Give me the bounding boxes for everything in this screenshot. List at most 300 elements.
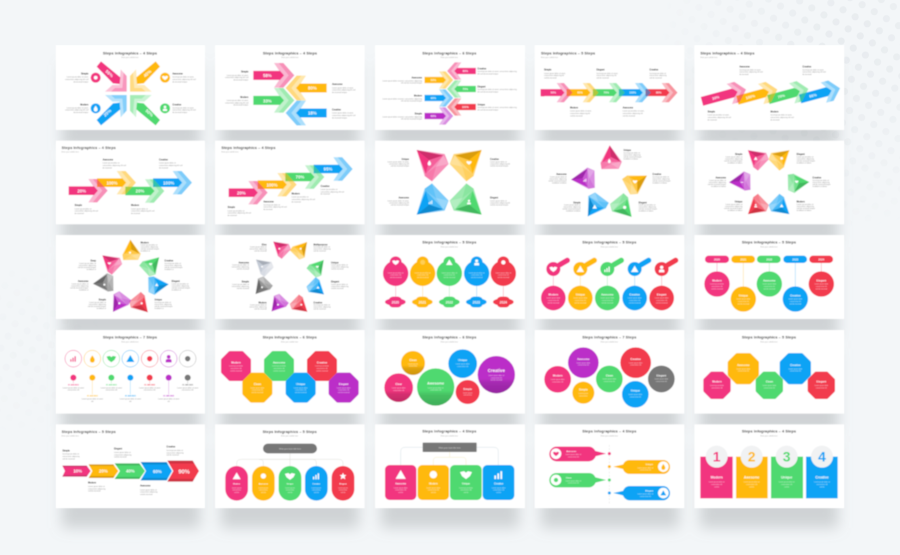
callout: green: Lorem ipsum dolor sit	[565, 479, 582, 482]
title: Steps Infographics – 4 Steps	[422, 430, 476, 434]
callout: yellow: Unique	[646, 464, 654, 466]
label: Awesome: Awesome	[623, 107, 634, 110]
label: Unique: incididunt ut labore	[623, 157, 638, 160]
label: Elegant: Elegant	[797, 153, 805, 156]
arrow: red: 80%	[656, 91, 662, 95]
panel: slide 3 six interlocking arrows: Enter your subtitle here	[441, 56, 458, 59]
label: Unique: sed do eiusmod	[331, 269, 343, 271]
step: red	[491, 256, 516, 307]
label: Modern: Modern	[770, 110, 779, 113]
label: Simple: Lorem ipsum dolor sit amet,	[67, 76, 89, 79]
step: pink: consectetur elit	[548, 299, 559, 302]
callout: yellow: Lorem ipsum dolor sit	[637, 466, 654, 469]
label: Multipurpose: Multipurpose	[313, 243, 328, 246]
panel: slide 8 four gems	[375, 141, 525, 224]
bubble: green: Clean	[606, 373, 613, 377]
octagon: pink: Modern	[712, 380, 722, 384]
label: Simple: consectetur adipiscing	[232, 285, 249, 288]
callout: green	[549, 473, 611, 487]
label: Modern: consectetur adipiscing	[88, 487, 105, 490]
panel: slide 5 slanted arrows: Enter your subtitle here	[700, 56, 718, 59]
arrow: pink	[69, 179, 108, 202]
label: Simple: consectetur adipiscing	[89, 303, 106, 306]
label: Modern: Lorem ipsum dolor sit	[292, 196, 309, 199]
callout: blue	[608, 486, 670, 500]
bubble: yellow: Lorem ipsum	[408, 363, 418, 365]
octagon: red: Lorem ipsum dolor	[814, 385, 829, 387]
label: Creative: Lorem ipsum dolor sit amet,	[332, 112, 354, 115]
label: Multipurpose: Lorem ipsum dolor sit	[313, 246, 331, 249]
label: Creative: sed do eiusmod tempor	[490, 165, 509, 168]
label: Elegant: consectetur adipiscing	[172, 284, 189, 287]
panel: slide 15 year pills and circles	[694, 235, 844, 319]
label: Awesome: do eiusmod	[739, 74, 748, 76]
chevron: blue 60%	[141, 462, 172, 480]
panel: slide 17 six octagons	[215, 330, 365, 414]
label: Deep: incididunt ut	[87, 268, 97, 271]
label: Creative: Lorem ipsum dolor sit	[649, 72, 667, 75]
connectors inner	[433, 452, 466, 465]
label: Awesome: sed do eiusmod	[237, 269, 249, 271]
label: Awesome: Awesome	[332, 83, 343, 86]
label: Simple: Lorem ipsum dolor sit	[564, 204, 581, 207]
label: Unique: consectetur adipiscing	[725, 205, 742, 208]
arrow: yellow 80%	[286, 76, 327, 100]
label: Unique: consectetur adipiscing elit	[389, 163, 410, 166]
label: Unique: Unique	[623, 150, 632, 152]
label: Creative: sed do eiusmod	[649, 77, 662, 79]
card: 3 Unique	[771, 446, 803, 498]
panel: slide 6 alternating arrows	[56, 141, 205, 224]
label: Creative: consectetur adipiscing elit sed	[172, 109, 196, 112]
octagon: green: Lorem ipsum dolor	[762, 385, 777, 387]
gem: blue	[306, 277, 324, 294]
step: pink 2020: sed do eiusmod	[711, 288, 723, 290]
label: Simple: consectetur adipiscing elit sed	[65, 78, 88, 81]
bubble: purple	[568, 347, 599, 378]
label: Awesome: Awesome	[172, 73, 184, 76]
connectors	[237, 453, 343, 466]
label: Unique: Lorem ipsum dolor sit	[154, 301, 172, 304]
step: pink 2020: consectetur elit	[711, 285, 723, 288]
step: blue: 2023	[473, 300, 480, 304]
octagon: green: consectetur elit	[764, 386, 775, 389]
gem: yellow	[618, 169, 647, 198]
step: blue: sed do eiusmod	[471, 277, 483, 279]
label: Simple: Simple	[228, 207, 236, 209]
label: Modern: sed do eiusmod	[570, 115, 582, 117]
label: Awesome: Awesome	[103, 158, 114, 161]
step: green: 2022	[446, 300, 453, 304]
label: Simple: incididunt ut	[97, 307, 107, 310]
octagon: red: Elegant	[817, 380, 826, 384]
step: red 2024: Elegant	[817, 278, 826, 282]
icon: pink circle	[91, 73, 101, 83]
label: Creative: consectetur adipiscing	[166, 451, 184, 454]
octagon: pink: sed do eiusmod	[230, 370, 242, 372]
label: Awesome: incididunt ut labore	[711, 185, 726, 188]
label: Simple: Simple	[62, 450, 70, 452]
panel: slide 22 org chart with pills: Enter your subtitle here	[281, 435, 298, 438]
card: yellow	[252, 466, 275, 501]
bubble: yellow: Lorem ipsum	[579, 393, 589, 395]
gem: red	[290, 294, 307, 312]
step: yellow: Lorem ipsum dolor	[573, 298, 588, 300]
card: 4 Creative: Creative	[815, 475, 829, 479]
label: Awesome: consectetur adipiscing	[140, 491, 157, 494]
title: Steps Infographics – 5 Steps	[62, 430, 116, 434]
label: Modern: Modern	[570, 107, 579, 110]
label: Simple: do eiusmod tempor	[73, 80, 89, 83]
step: green	[595, 257, 625, 310]
gem: green	[609, 192, 634, 217]
step 4 blue: Lorem ipsum dolor sit amet	[120, 398, 141, 401]
card: blue: consectetur elit	[493, 489, 505, 492]
chevron: blue 60%: 60%	[153, 469, 162, 474]
bubble: yellow: Simple	[579, 388, 588, 392]
label: Modern: consectetur adipiscing	[797, 205, 814, 208]
label: Creative: consectetur adipiscing elit	[490, 163, 511, 166]
gem: yellow	[450, 150, 482, 181]
arrow: yellow	[130, 61, 160, 92]
bubble: blue	[622, 381, 649, 408]
bubble: blue	[448, 349, 477, 378]
octagon: purple: Elegant	[339, 382, 349, 386]
gem: pink	[273, 242, 291, 259]
bubble: red	[620, 347, 651, 378]
arrow: yellow: 60%	[577, 91, 583, 95]
octagon: purple	[329, 373, 359, 403]
panel: slide 21 growing chevrons: Enter your subtitle here	[62, 435, 79, 438]
label: Modern: Modern	[414, 95, 423, 98]
label: Modern: elit sed do eiusmod tempor	[401, 100, 422, 103]
arrow: red	[646, 83, 678, 102]
octagon: red: Creative	[317, 360, 328, 364]
label: Elegant: consectetur adipiscing	[331, 285, 348, 288]
step 4 blue: 01 JAN 2023	[125, 395, 136, 398]
card: green	[450, 465, 482, 500]
label: Creative: consectetur adipiscing	[313, 306, 331, 309]
octagon: red: sed do eiusmod	[316, 370, 328, 372]
label: Creative: Creative	[172, 103, 182, 106]
title: Steps Infographics – 5 Steps	[582, 241, 636, 245]
card: pink: Awesome	[395, 483, 407, 486]
label: Elegant: sed do eiusmod tempor	[172, 286, 190, 289]
step 5 red: 01 JAN 2023	[144, 384, 155, 387]
bubble: green: Awesome	[427, 381, 444, 385]
arrow: pink	[699, 79, 749, 111]
label: Creative: sed do eiusmod tempor	[812, 183, 831, 186]
card: pink: consectetur	[232, 489, 241, 492]
step: red: consectetur elit	[656, 299, 668, 302]
step: pink: 2020	[392, 300, 399, 304]
step: yellow 2021: Unique	[739, 293, 748, 297]
bubble: pink: Clear	[395, 382, 402, 386]
label: Creative: Creative	[332, 108, 342, 111]
arrow: green: 50%	[144, 108, 154, 118]
arrow: yellow 80%: 80%	[308, 86, 317, 91]
panel: slide 14 keys and circles: Enter your subtitle here	[601, 245, 618, 248]
card: yellow: Lorem ipsum	[259, 487, 269, 489]
arrow: pink: 55%	[104, 69, 114, 78]
card: red	[332, 466, 354, 501]
arrow: pink 58%	[253, 63, 294, 88]
label: Simple: Simple	[241, 72, 249, 74]
card: 1 Modern: sed do	[714, 486, 719, 488]
gem: pink	[417, 150, 449, 181]
step: yellow 2021: Lorem ipsum dolor	[736, 299, 751, 301]
bubble: pink: Modern	[553, 374, 563, 378]
arrow: green: 70%	[463, 87, 469, 91]
step: blue 2023	[783, 256, 808, 312]
bubble: yellow	[572, 382, 594, 404]
octagon: blue: consectetur elit	[295, 389, 307, 392]
panel: slide 17 six octagons: Enter your subtitle here	[281, 340, 298, 343]
step 3 green	[101, 350, 122, 392]
card: 4 Creative: 4	[818, 449, 826, 465]
label: Simple: consectetur adipiscing elit sed	[225, 76, 248, 79]
title: Steps Infographics – 6 Steps	[422, 336, 476, 340]
bubble: purple: Lorem ipsum dolor	[576, 362, 591, 364]
arrow: green 33%	[253, 88, 294, 113]
card: 4 Creative: consectetur elit	[816, 483, 828, 486]
octagon: purple: sed do eiusmod	[338, 392, 350, 394]
card: 2 Awesome: 2	[748, 449, 756, 465]
label: Elegant: sed do eiusmod	[331, 288, 343, 290]
bubble: pink	[384, 373, 413, 402]
bubble: pink: consectetur elit	[393, 389, 405, 392]
label: Modern: Modern	[292, 193, 300, 196]
step: red	[649, 257, 679, 310]
label: Awesome: sed do eiusmod tempor	[548, 179, 567, 182]
arrow: yellow: 100%	[106, 180, 118, 185]
title: Steps Infographics – 4 Steps	[62, 146, 116, 150]
arrow: pink	[229, 181, 268, 204]
octagon: green: sed do eiusmod	[273, 370, 285, 372]
card: yellow: sed do	[261, 492, 266, 494]
arrow: red	[447, 98, 476, 116]
card: yellow: Lorem ipsum dolor	[426, 487, 441, 489]
octagon: pink	[221, 351, 251, 381]
label: Awesome: Awesome	[78, 280, 89, 283]
title: Steps Infographics – 5 Steps	[422, 241, 476, 245]
octagon: green: Awesome	[273, 360, 286, 364]
arrow: pink: 20%	[77, 188, 86, 193]
octagon: purple: consectetur elit	[338, 389, 350, 392]
label: Simple: Simple	[242, 282, 250, 284]
label: Elegant: incididunt ut labore	[639, 210, 653, 213]
label: Awesome: do eiusmod	[263, 209, 272, 211]
arrow: blue 18%	[286, 101, 327, 125]
arrow: yellow: 40%	[142, 69, 152, 78]
step: red: 2024	[500, 300, 507, 304]
label: Simple: Lorem ipsum dolor sit	[75, 207, 92, 210]
step: green 2022: sed do eiusmod	[763, 288, 775, 290]
label: Awesome: do eiusmod tempor	[172, 80, 188, 83]
gem: green	[780, 168, 809, 197]
step: green 2022: 2022	[766, 257, 773, 261]
card: green: Lorem ipsum dolor	[459, 487, 473, 489]
card: 1 Modern: consectetur elit	[711, 483, 723, 486]
step: pink: sed do eiusmod	[547, 302, 559, 304]
card: blue: Lorem ipsum dolor	[492, 487, 506, 489]
label: Creative: do eiusmod	[802, 74, 811, 76]
card: 1 Modern: Lorem ipsum dolor sit	[709, 481, 725, 484]
step 6 purple: elit	[168, 400, 170, 403]
bubble: red: Lorem ipsum	[463, 392, 473, 394]
label: Simple: sed do eiusmod tempor	[724, 160, 743, 163]
label: Simple: Lorem ipsum dolor sit	[89, 301, 107, 304]
label: Creative: Creative	[649, 69, 659, 72]
label: Creative: sed do eiusmod tempor	[652, 179, 671, 182]
panel: slide 16 seven step timeline: Enter your subtitle here	[121, 340, 139, 343]
label: Simple: Simple	[735, 154, 743, 156]
step: blue	[622, 257, 652, 310]
arrow: green: 70%	[604, 91, 610, 95]
step: blue 2023: 2023	[792, 257, 799, 261]
label: Unique: Unique	[154, 300, 163, 302]
panel: slide 20 five octagons: Enter your subtitle here	[760, 340, 778, 343]
label: Awesome: Lorem ipsum dolor sit	[72, 282, 89, 285]
label: Creative: Lorem ipsum dolor sit	[166, 449, 184, 452]
label: Unique: Lorem ipsum dolor sit	[726, 203, 743, 206]
gem: green	[139, 256, 159, 277]
card: 4 Creative	[806, 446, 838, 498]
label: Elegant: Elegant	[114, 448, 122, 451]
label: Modern: Lorem ipsum dolor sit amet,	[67, 106, 89, 109]
title: Steps Infographics – 7 Steps	[103, 336, 157, 340]
label: Awesome: consectetur adipiscing	[232, 266, 249, 269]
label: Creative: consectetur adipiscing elit sed	[802, 71, 826, 74]
card: yellow: consectetur	[259, 489, 268, 492]
label: Simple: do eiusmod	[75, 213, 84, 215]
label: Awesome: do eiusmod	[103, 167, 112, 169]
label: Awesome: Awesome	[412, 77, 423, 80]
step: blue: Creative	[629, 292, 640, 296]
gem: blue	[769, 194, 789, 214]
label: Modern: consectetur adipiscing	[141, 246, 158, 249]
step 5 red	[139, 350, 161, 392]
label: Unique: Lorem ipsum dolor sit	[331, 264, 348, 267]
gem: purple	[571, 163, 603, 196]
label: Awesome: do eiusmod tempor	[332, 91, 347, 94]
label: Awesome: consectetur adipiscing elit sed	[263, 206, 287, 209]
label: Awesome: Lorem ipsum dolor sit	[550, 175, 567, 178]
octagon: pink: Modern	[231, 360, 241, 364]
bubble: purple: Creative	[488, 368, 505, 373]
bubble: blue: Lorem ipsum dolor	[628, 394, 643, 396]
label: Elegant: consectetur adipiscing	[114, 453, 131, 456]
label: Simple: elit sed do eiusmod tempor	[401, 118, 422, 121]
card: pink	[225, 466, 248, 501]
label: Awesome: Lorem ipsum dolor sit	[140, 488, 157, 491]
card: 2 Awesome	[736, 446, 768, 498]
step: red 2024	[809, 256, 834, 297]
label: Awesome: Lorem ipsum dolor sit amet,	[623, 110, 645, 113]
panel: slide 20 five octagons	[694, 330, 844, 414]
callout: pink: Lorem ipsum dolor sit	[565, 453, 582, 456]
label: Unique: Lorem ipsum dolor sit amet,	[387, 161, 410, 164]
label: Awesome: consectetur adipiscing	[71, 284, 88, 287]
label: Awesome: Lorem ipsum dolor sit amet,	[172, 76, 194, 79]
label: Simple: consectetur adipiscing elit sed	[228, 212, 251, 215]
bubble: blue: Unique	[631, 389, 640, 393]
label: Modern: Lorem ipsum dolor sit amet,	[227, 99, 249, 102]
card: green: sed do	[464, 492, 469, 494]
step: green 2022: Lorem ipsum dolor	[762, 284, 777, 286]
gem: pink	[102, 255, 122, 275]
arrow: blue: 20%	[102, 108, 112, 118]
label: Unique: incididunt ut	[154, 307, 164, 310]
label: Awesome: Lorem ipsum dolor sit amet,	[739, 69, 761, 72]
label: Elegant: Elegant	[596, 69, 605, 72]
label: Elon: consectetur adipiscing	[249, 248, 267, 251]
label: Modern: consectetur adipiscing elit sed	[770, 116, 794, 119]
step: green 2022: Awesome	[763, 278, 776, 282]
step: yellow: sed do eiusmod	[417, 277, 429, 279]
icon: green circle	[160, 103, 170, 113]
arrow: green	[593, 83, 625, 102]
label: Simple: consectetur adipiscing elit sed	[708, 116, 731, 119]
chevron: yellow 20%: 20%	[99, 469, 108, 474]
header pill: Write your main title here	[279, 447, 302, 450]
bubble: purple: Lorem ipsum dolor sit	[488, 374, 505, 377]
label: Modern: sed do eiusmod	[88, 491, 100, 493]
gem: yellow	[290, 242, 307, 260]
header box	[423, 443, 477, 452]
title: Steps Infographics – 7 Steps	[582, 336, 636, 340]
panel: slide 9 five gems	[535, 141, 684, 224]
panel: slide 2 interlocking arrows: Enter your subtitle here	[281, 56, 299, 59]
step 5 red: consectetur elit	[144, 389, 156, 392]
label: Creative: Lorem ipsum dolor sit amet,	[172, 106, 194, 109]
label: Simple: sed do eiusmod	[237, 288, 249, 290]
arrow: green: 70%	[296, 175, 304, 180]
label: Simple: Simple	[415, 114, 423, 116]
octagon: yellow: consectetur elit	[738, 370, 749, 373]
arrow: green: 20%	[136, 189, 144, 194]
label: Creative: consectetur adipiscing	[652, 177, 670, 180]
callout: pink: Awesome	[566, 450, 577, 453]
label: Awesome: consectetur adipiscing elit	[623, 112, 643, 115]
step 1 pink: consectetur elit	[67, 389, 80, 392]
chevron: green 40%: 40%	[126, 469, 135, 474]
card: 3 Unique: 3	[783, 449, 791, 465]
step: yellow: Unique	[576, 292, 585, 296]
step: green: Lorem ipsum dolor sit	[441, 271, 458, 274]
step: pink: Lorem ipsum dolor	[546, 298, 561, 300]
octagon: green	[756, 372, 783, 399]
card: red: consectetur	[339, 489, 348, 492]
label: Creative: Creative	[802, 65, 812, 68]
title: Steps Infographics – 6 Steps	[263, 336, 317, 340]
gem: purple	[272, 294, 289, 311]
octagon: blue: Lorem ipsum dolor	[294, 387, 308, 389]
card: 2 Awesome: Lorem ipsum dolor sit	[744, 481, 760, 484]
label: Creative: incididunt ut labore	[652, 181, 667, 184]
label: Modern: consectetur adipiscing elit	[570, 112, 591, 115]
step: yellow: sed do eiusmod	[574, 302, 586, 304]
gem: red	[128, 291, 150, 312]
arrow: yellow: 100%	[745, 94, 756, 100]
bubble: blue: consectetur elit	[457, 365, 469, 368]
label: Creative: incididunt ut	[164, 268, 174, 271]
label: Awesome: Lorem ipsum dolor sit	[709, 179, 727, 182]
label: Elegant: Lorem ipsum dolor sit amet,	[596, 72, 618, 75]
card: green: consectetur elit	[460, 489, 472, 492]
label: Modern: incididunt ut	[141, 250, 151, 253]
gem: gray	[93, 270, 121, 297]
